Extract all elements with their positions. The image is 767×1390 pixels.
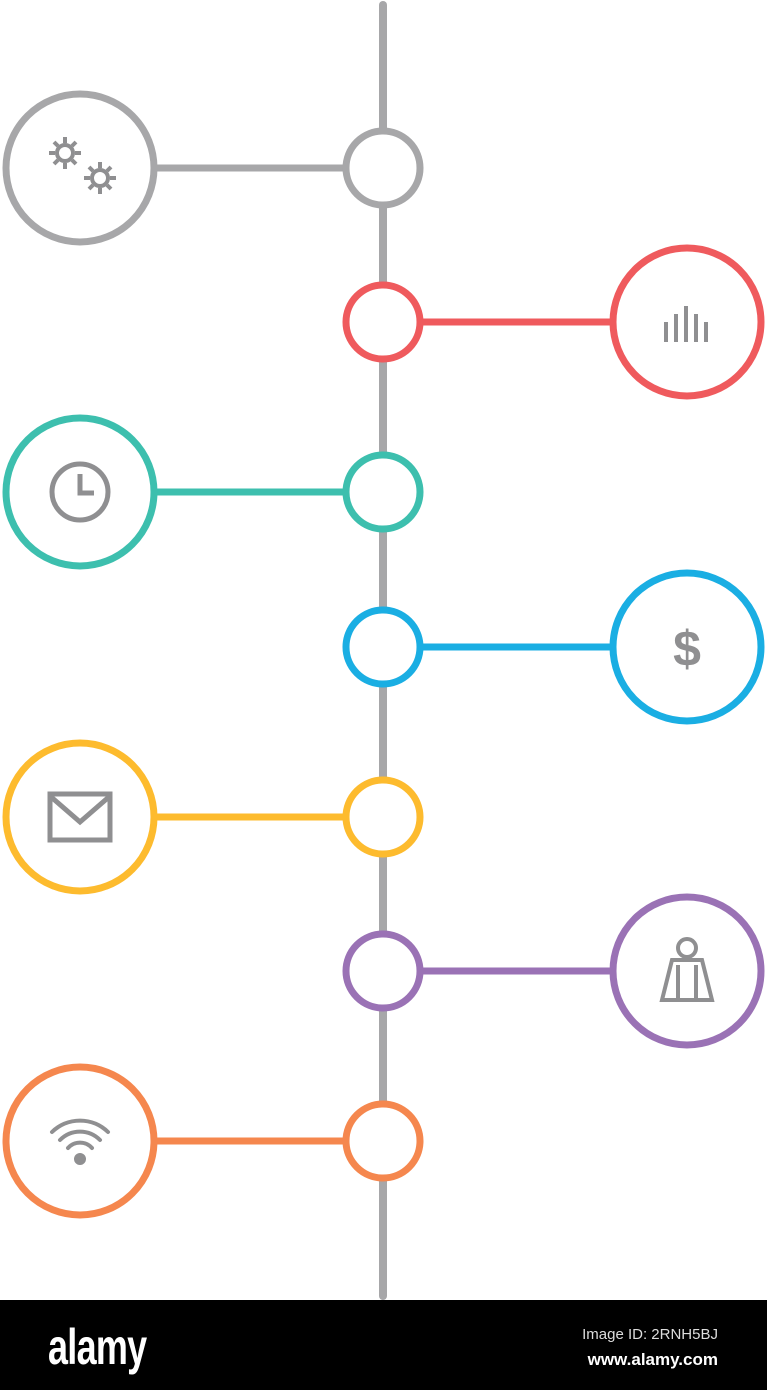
icon: clock: [52, 464, 108, 520]
footer bar: www.alamy.com: [587, 1350, 718, 1369]
footer bar: alamy: [48, 1320, 147, 1375]
step 1: gears: [6, 94, 420, 242]
footer bar: Image ID: 2RNH5BJ: [582, 1326, 718, 1343]
step 4: dollar: [346, 573, 761, 721]
icon: envelope: [50, 794, 110, 840]
step 2: chart: [346, 248, 761, 396]
icon: person: [662, 939, 712, 1000]
vertical spine: [379, 5, 387, 1296]
icon: bar chart: [666, 306, 706, 342]
step 5: mail: [6, 743, 420, 891]
icon: dollar: $: [673, 621, 701, 677]
icon: wifi: [52, 1121, 108, 1163]
step 3: clock: [6, 418, 420, 566]
step 7: wifi: [6, 1067, 420, 1215]
step 6: person: [346, 897, 761, 1045]
icon: gears: [49, 137, 116, 194]
footer bar: [0, 1300, 767, 1390]
